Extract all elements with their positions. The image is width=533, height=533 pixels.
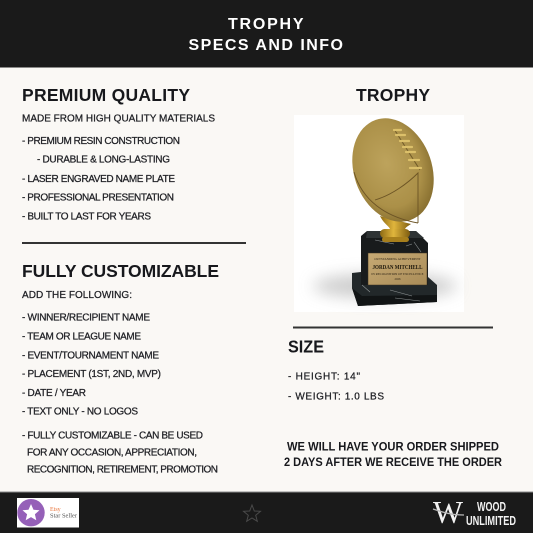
header band (0, 0, 533, 68)
logo: wood unlimited: WOOD (477, 500, 506, 514)
etsy star seller badge: Etsy (50, 507, 61, 513)
feature list: premium quality (22, 114, 215, 222)
dimensions: - WEIGHT: 1.0 LBS (288, 392, 384, 402)
customization list: - WINNER/RECIPIENT NAME (22, 312, 150, 324)
feature list: premium quality: - DURABLE & LONG-LASTING (37, 155, 170, 166)
feature list: premium quality: - BUILT TO LAST FOR YEARS (22, 211, 151, 222)
name plate: OUTSTANDING ACHIEVEMENT (374, 257, 421, 261)
title: SPECS AND INFO (188, 37, 343, 54)
heading: trophy: TROPHY (356, 85, 430, 105)
marble base (352, 231, 437, 306)
customization list: - FULLY CUSTOMIZABLE - CAN BE USED (22, 431, 203, 442)
shipping notice (284, 442, 503, 469)
name plate (368, 253, 427, 285)
dimensions (288, 372, 384, 402)
trophy stem (380, 216, 411, 242)
name plate: 2026 (394, 277, 401, 281)
title (188, 16, 343, 54)
heading: fully customizable: FULLY CUSTOMIZABLE (22, 261, 219, 281)
panel: size (288, 337, 384, 402)
panel: premium quality (22, 85, 215, 222)
heading: size: SIZE (288, 337, 324, 357)
customization list: - EVENT/TOURNAMENT NAME (22, 350, 159, 362)
feature list: premium quality: - PROFESSIONAL PRESENTATION (22, 193, 174, 204)
etsy star seller badge: Star Seller (50, 514, 77, 520)
footer band (0, 492, 533, 533)
logo: wood unlimited: W (433, 494, 464, 530)
trophy photo (294, 107, 464, 312)
customization list: - DATE / YEAR (22, 388, 86, 399)
panel: fully customizable (22, 261, 219, 476)
customization list: - TEXT ONLY - NO LOGOS (22, 407, 138, 418)
football (339, 107, 447, 233)
feature list: premium quality: MADE FROM HIGH QUALITY MATERIALS (22, 114, 215, 125)
etsy star seller badge (17, 498, 79, 528)
title: TROPHY (228, 16, 304, 33)
customization list: FOR ANY OCCASION, APPRECIATION, (27, 448, 197, 459)
feature list: premium quality: - LASER ENGRAVED NAME PLATE (22, 174, 175, 185)
logo: wood unlimited (433, 494, 516, 530)
heading: premium quality: PREMIUM QUALITY (22, 85, 190, 105)
customization list: ADD THE FOLLOWING: (22, 290, 132, 301)
logo: wood unlimited: UNLIMITED (466, 514, 516, 528)
customization list: - PLACEMENT (1ST, 2ND, MVP) (22, 369, 161, 380)
icon: star outline (244, 505, 260, 521)
name plate: IN RECOGNITION OF EXCELLENCE (371, 272, 424, 276)
name plate: JORDAN MITCHELL (372, 265, 422, 271)
customization list: - TEAM OR LEAGUE NAME (22, 331, 141, 342)
feature list: premium quality: - PREMIUM RESIN CONSTRUCTION (22, 136, 180, 147)
dimensions: - HEIGHT: 14" (288, 372, 360, 382)
customization list (22, 290, 218, 476)
customization list: RECOGNITION, RETIREMENT, PROMOTION (27, 465, 218, 476)
shipping notice: 2 DAYS AFTER WE RECEIVE THE ORDER (284, 457, 503, 469)
shipping notice: WE WILL HAVE YOUR ORDER SHIPPED (287, 442, 499, 454)
